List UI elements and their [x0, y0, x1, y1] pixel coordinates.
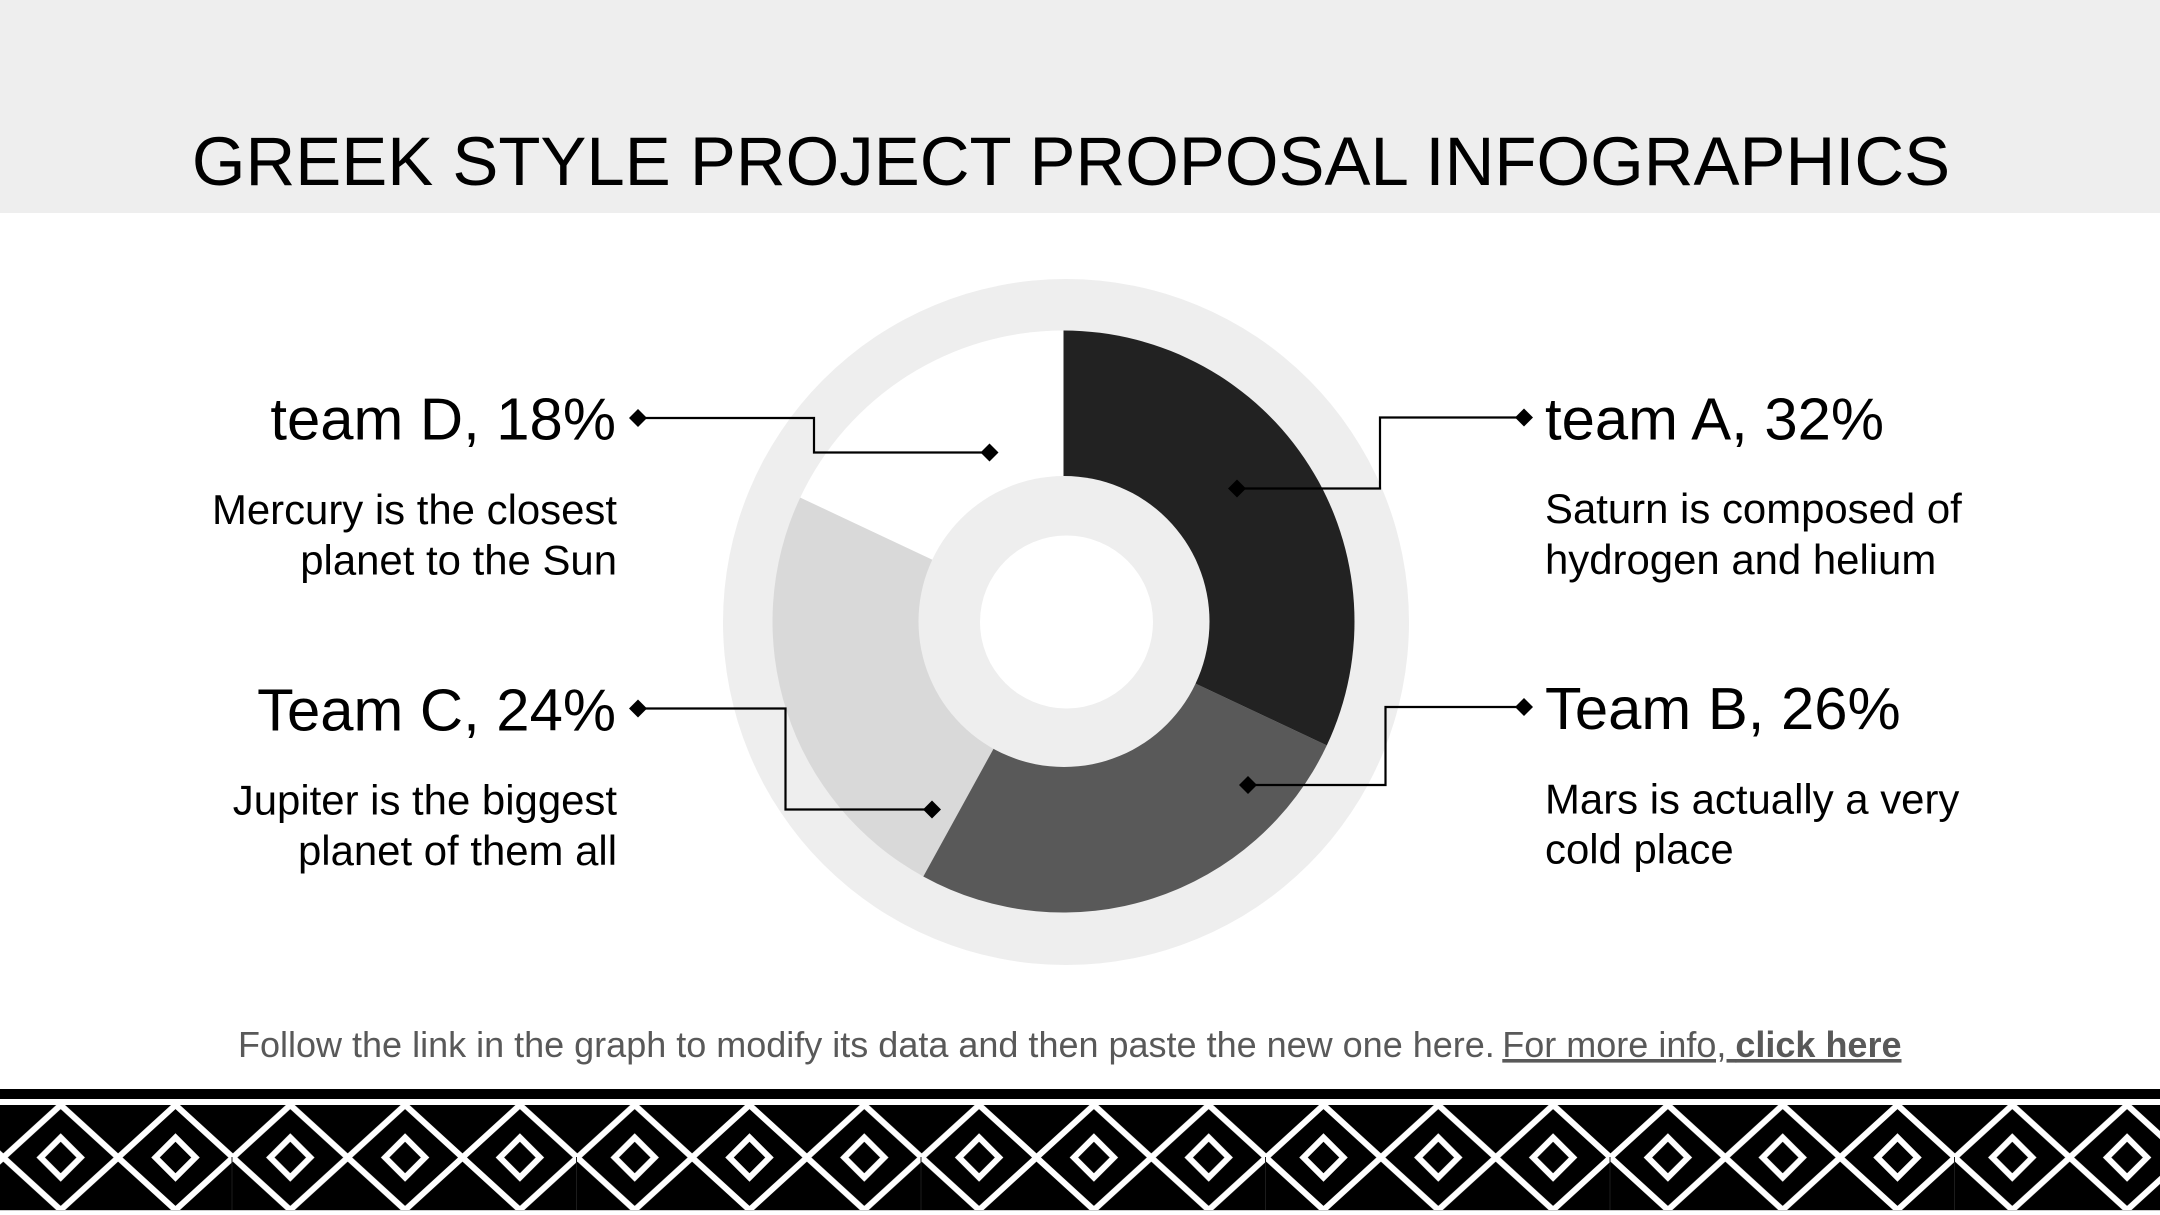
- label: team D: [212, 386, 617, 584]
- connector: team A: [1228, 408, 1533, 498]
- label: team D: planet to the Sun: [300, 536, 617, 584]
- label: team B: cold place: [1545, 826, 1734, 872]
- title: GREEK STYLE PROJECT PROPOSAL INFOGRAPHICS: [192, 123, 1950, 200]
- connector: team B: [1239, 698, 1533, 794]
- segment: team A 32%: [1064, 330, 1354, 745]
- header band: [0, 0, 2160, 213]
- label: team C: planet of them all: [298, 827, 617, 874]
- label: team C: [233, 676, 617, 874]
- label: team B: Mars is actually a very: [1545, 776, 1959, 822]
- label: team A: [1545, 386, 1962, 583]
- segment: team C 24%: [773, 498, 1064, 876]
- centre hole: [980, 536, 1153, 708]
- label: team D: team D, 18%: [270, 386, 616, 452]
- label: team A: team A, 32%: [1545, 386, 1884, 452]
- label: team A: Saturn is composed of: [1545, 485, 1962, 532]
- label: team B: Team B, 26%: [1545, 675, 1901, 742]
- label: team D: Mercury is the closest: [212, 486, 617, 533]
- connector: team D: [629, 409, 998, 462]
- decorative border band: [0, 1089, 2160, 1211]
- inner hub: [918, 476, 1210, 767]
- footer note: Follow the link in the graph to modify its data and then paste the new one here. For more info, click here: [238, 1024, 1902, 1065]
- segment: team D 18%: [800, 330, 1064, 622]
- label: team C: Jupiter is the biggest: [233, 776, 617, 824]
- donut chart: [723, 279, 1409, 965]
- segment: team B 26%: [923, 622, 1327, 912]
- label: team B: [1545, 675, 1959, 872]
- label: team A: hydrogen and helium: [1545, 536, 1936, 583]
- label: team C: Team C, 24%: [257, 676, 616, 744]
- outer ring: [723, 279, 1409, 965]
- connector: team C: [629, 700, 941, 818]
